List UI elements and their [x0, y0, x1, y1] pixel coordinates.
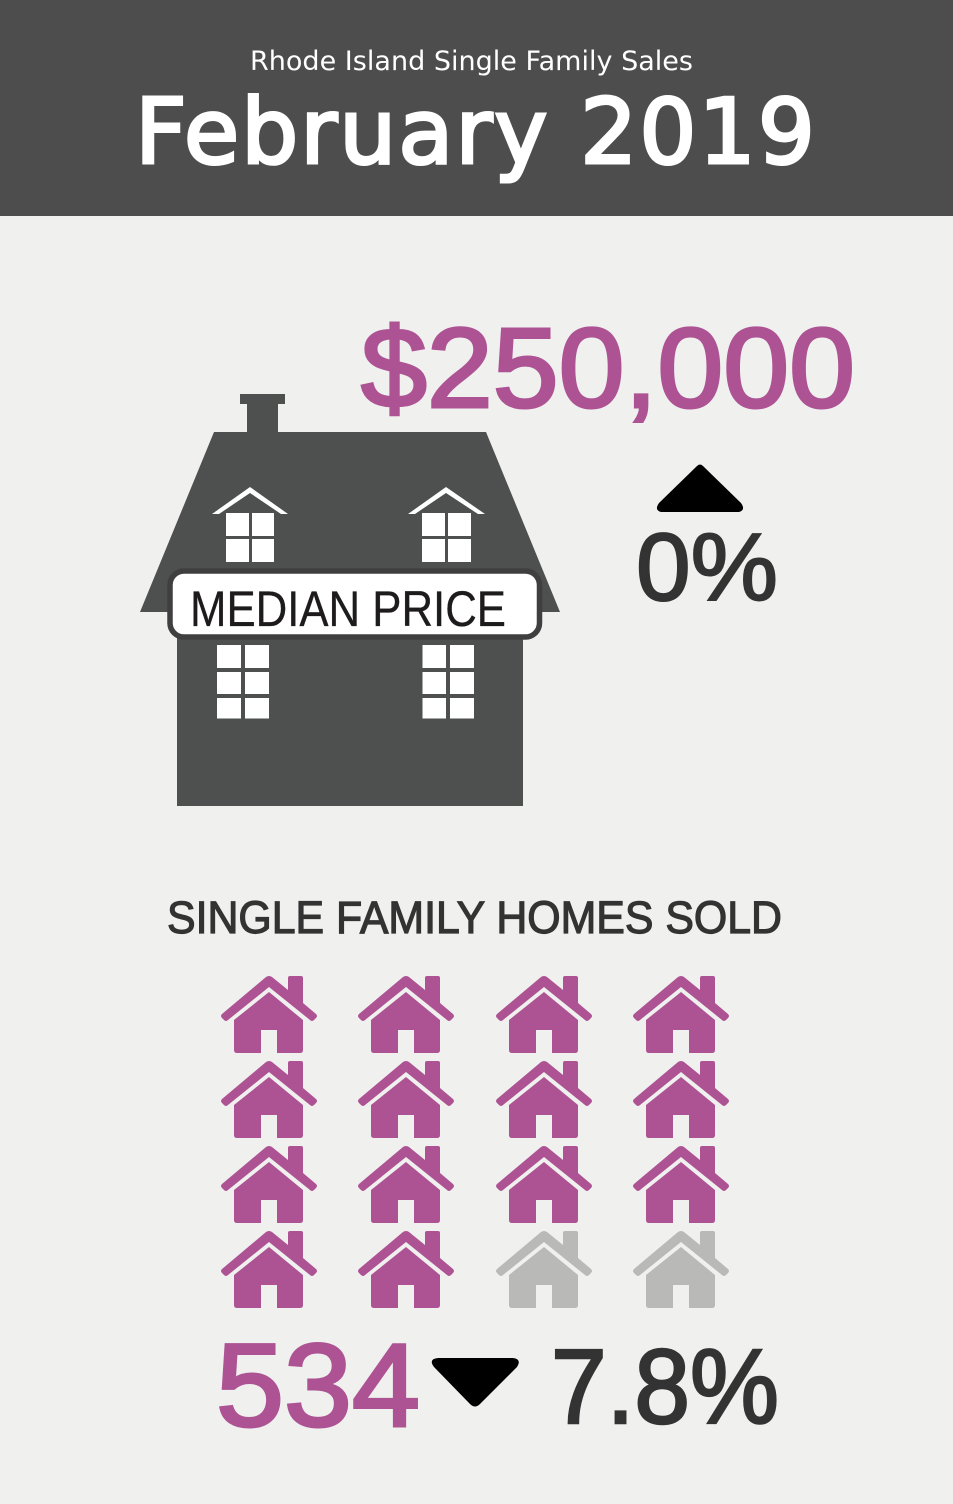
icon: down arrow: [432, 1358, 519, 1406]
title: February 2019: [135, 80, 815, 185]
sold home icons: [221, 976, 729, 1308]
house silhouette: [140, 394, 560, 806]
median price value: $250,000: [361, 305, 855, 431]
remaining home icons: [496, 1231, 729, 1308]
lower right window: [422, 645, 474, 718]
homes sold change: 7.8%: [551, 1328, 779, 1446]
homes sold heading: SINGLE FAMILY HOMES SOLD: [167, 892, 782, 943]
pictogram: homes sold: [221, 976, 729, 1308]
header banner: [0, 0, 953, 216]
median price label: MEDIAN PRICE: [190, 581, 506, 637]
icon: large house with median price label: [140, 394, 560, 806]
upper left window: [212, 487, 288, 562]
homes sold value: 534: [216, 1320, 420, 1452]
lower left window: [217, 645, 269, 718]
upper right window: [408, 487, 485, 562]
median price change: 0%: [636, 514, 778, 621]
subtitle: Rhode Island Single Family Sales: [250, 46, 693, 77]
icon: up arrow: [657, 464, 743, 512]
